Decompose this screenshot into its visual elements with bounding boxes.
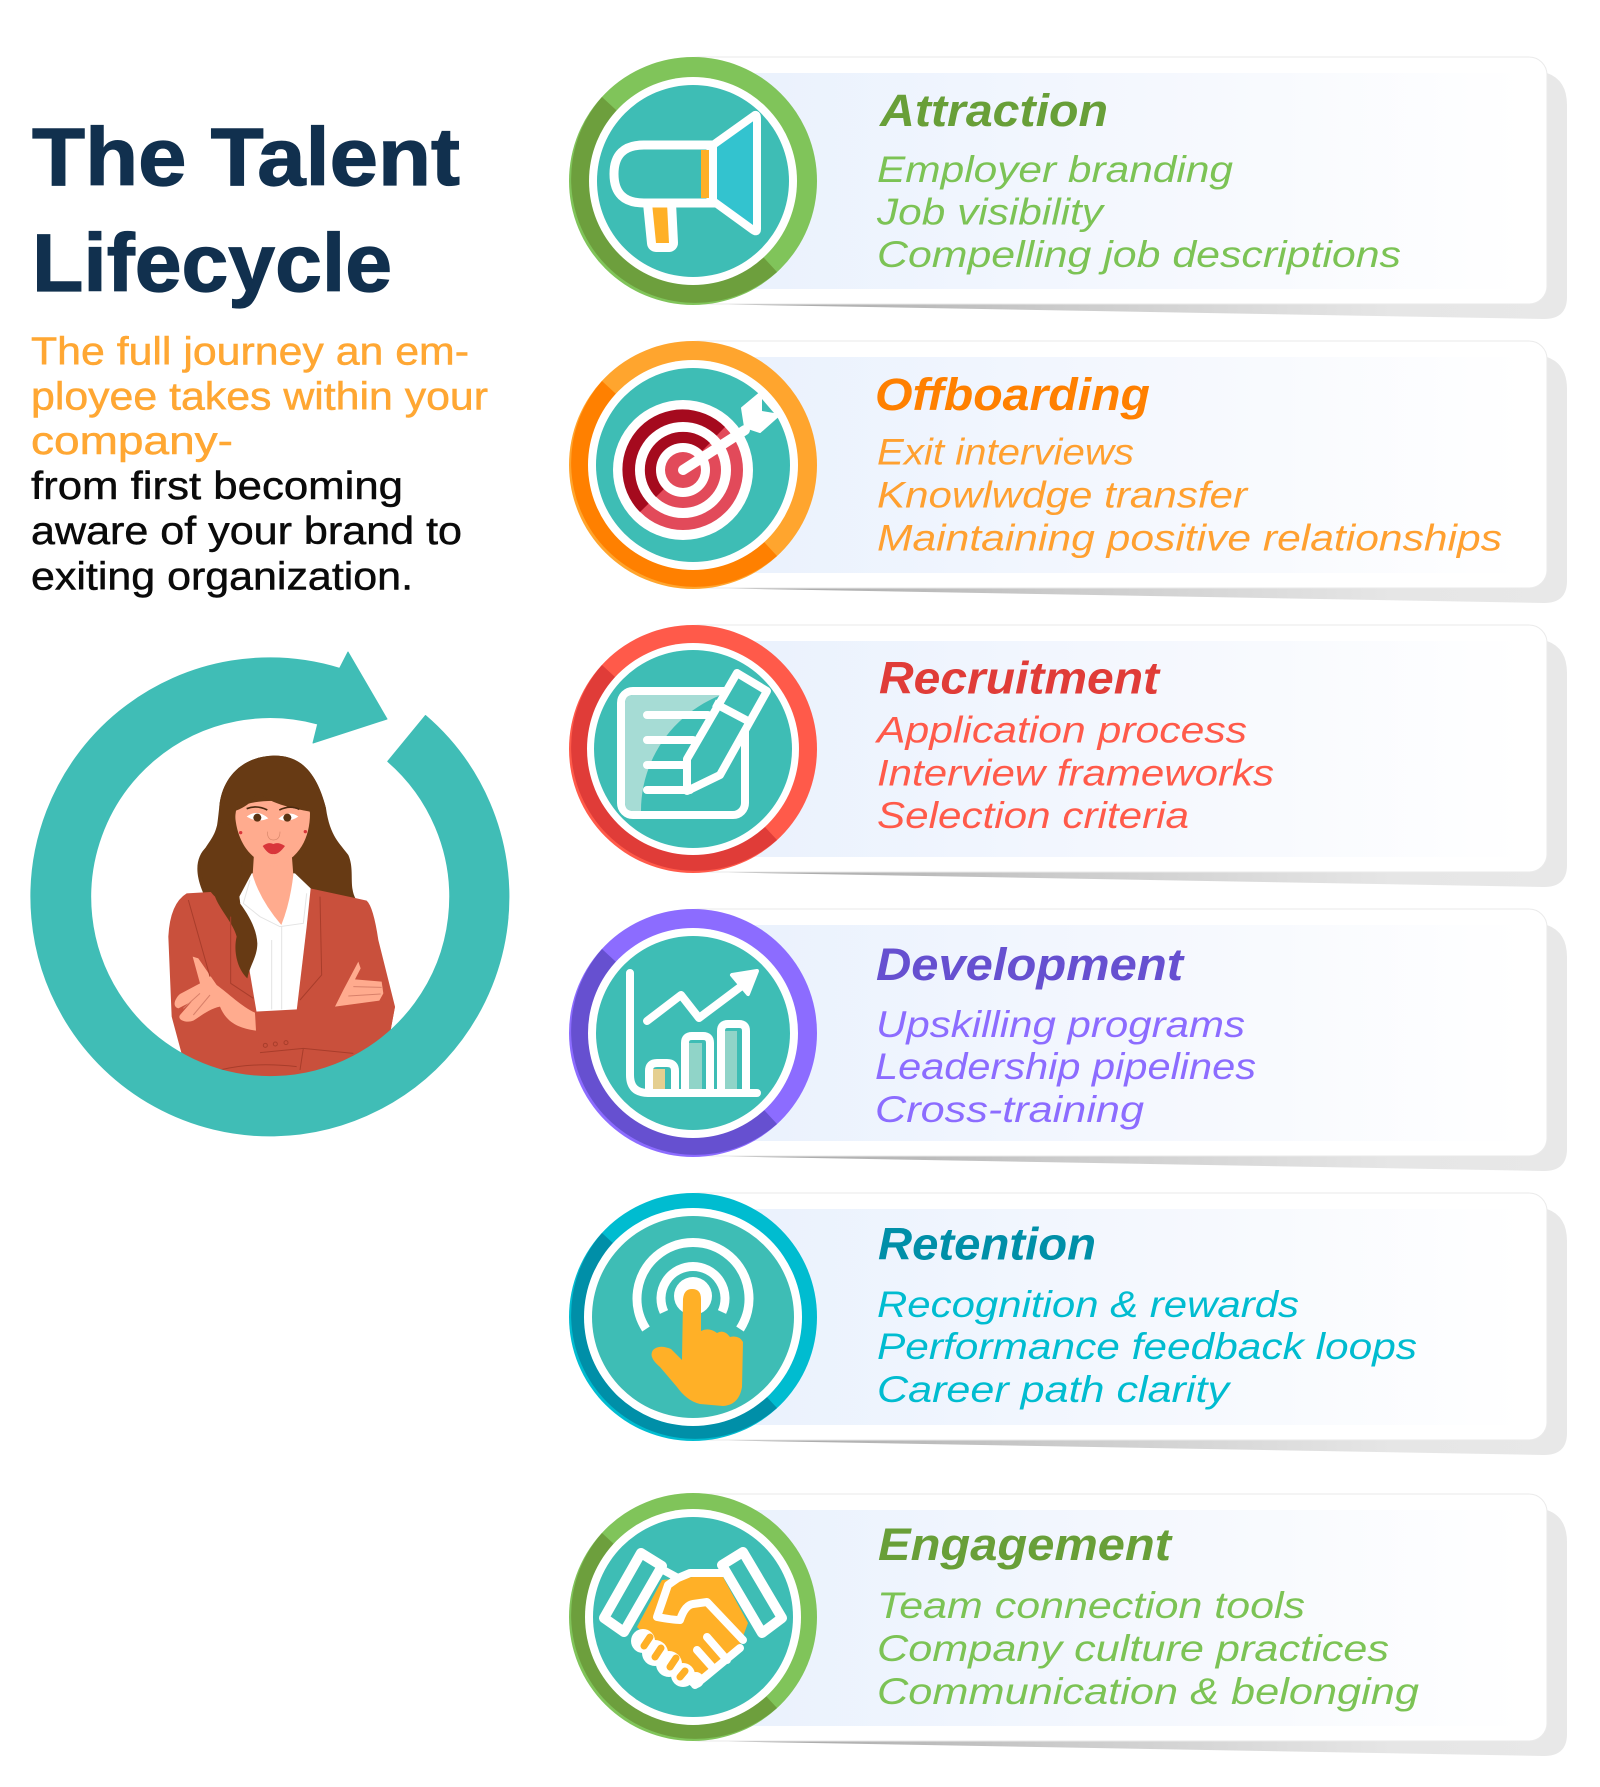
subtitle text block: ployee takes within your bbox=[31, 376, 488, 418]
text: attraction bbox=[876, 85, 1401, 275]
icon: handshake bbox=[569, 1493, 817, 1741]
text: recruitment: Interview frameworks bbox=[877, 752, 1274, 794]
text: attraction: Employer branding bbox=[877, 149, 1233, 190]
title: Lifecycle bbox=[32, 218, 392, 309]
circular arrow bbox=[31, 652, 509, 1136]
text: attraction: Compelling job descriptions bbox=[877, 234, 1401, 275]
panel: development bbox=[569, 909, 1567, 1171]
panel: retention bbox=[569, 1193, 1567, 1455]
subtitle text block: from first becoming bbox=[31, 465, 403, 508]
icon: target bbox=[569, 341, 817, 589]
text: retention: Retention bbox=[878, 1218, 1096, 1270]
text: development: Upskilling programs bbox=[876, 1004, 1245, 1045]
text: development: Leadership pipelines bbox=[875, 1046, 1256, 1087]
subtitle text block: aware of your brand to bbox=[31, 510, 462, 553]
text: offboarding: Exit interviews bbox=[877, 432, 1134, 472]
text: attraction: Job visibility bbox=[876, 192, 1106, 232]
panel: offboarding bbox=[569, 341, 1567, 603]
text: offboarding: Knowlwdge transfer bbox=[877, 474, 1249, 516]
text: offboarding bbox=[875, 369, 1502, 558]
text: recruitment: Application process bbox=[875, 710, 1247, 750]
text: attraction: Attraction bbox=[879, 85, 1108, 136]
title bbox=[32, 112, 460, 309]
icon: megaphone bbox=[569, 57, 817, 305]
text: retention: Recognition & rewards bbox=[877, 1284, 1299, 1325]
subtitle text block bbox=[31, 330, 488, 598]
subtitle text block: The full journey an em- bbox=[31, 330, 469, 374]
panel: engagement bbox=[569, 1493, 1567, 1756]
title: The Talent bbox=[32, 112, 460, 203]
text: development bbox=[875, 939, 1256, 1130]
text: offboarding: Offboarding bbox=[875, 369, 1150, 420]
icon: growth chart bbox=[569, 909, 817, 1157]
text: engagement: Team connection tools bbox=[877, 1585, 1305, 1626]
text: development: Cross-training bbox=[875, 1089, 1144, 1130]
text: retention: Career path clarity bbox=[877, 1369, 1232, 1410]
icon: touch hand bbox=[569, 1193, 817, 1441]
illustration: woman with crossed arms bbox=[168, 756, 395, 1107]
subtitle text block: company- bbox=[31, 420, 233, 463]
subtitle text block: exiting organization. bbox=[31, 556, 413, 598]
text: recruitment: Recruitment bbox=[879, 652, 1161, 704]
text: engagement: Engagement bbox=[878, 1519, 1173, 1570]
text: development: Development bbox=[876, 939, 1185, 990]
text: recruitment: Selection criteria bbox=[877, 795, 1189, 836]
panel: recruitment bbox=[569, 625, 1567, 887]
panel: attraction bbox=[569, 57, 1567, 319]
text: engagement bbox=[877, 1519, 1419, 1712]
text: offboarding: Maintaining positive relationships bbox=[877, 518, 1502, 558]
text: recruitment bbox=[875, 652, 1274, 836]
text: engagement: Company culture practices bbox=[877, 1628, 1389, 1669]
text: retention: Performance feedback loops bbox=[877, 1326, 1417, 1367]
icon: document and pencil bbox=[569, 625, 817, 873]
text: engagement: Communication & belonging bbox=[877, 1671, 1419, 1712]
text: retention bbox=[877, 1218, 1417, 1410]
